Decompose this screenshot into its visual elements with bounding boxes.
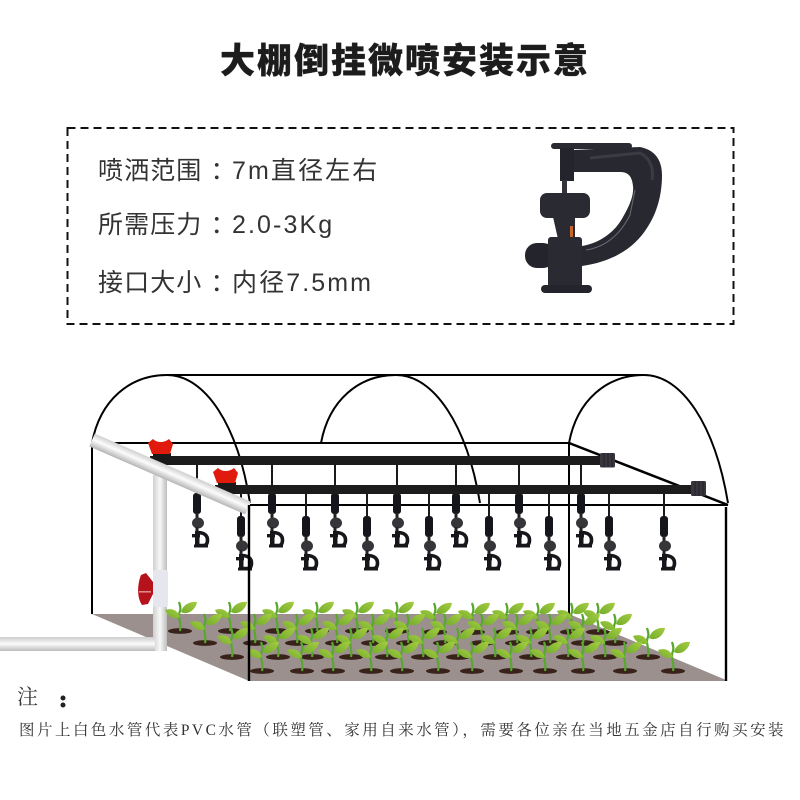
lower end cap (691, 481, 706, 496)
spec: connector size: 内径7.5mm (232, 269, 373, 297)
icon: micro sprinkler photo (525, 143, 662, 293)
title: 大棚倒挂微喷安装示意 (220, 41, 590, 81)
spec: spray range: 7m直径左右 (232, 157, 379, 185)
note heading: 注 (17, 685, 38, 709)
white vertical riser pipe (153, 475, 167, 651)
pipe union (153, 570, 168, 607)
seedlings (165, 602, 690, 674)
upper drip bar (150, 456, 602, 465)
greenhouse front post (248, 505, 250, 681)
spec: spray range: 喷洒范围 (98, 157, 202, 185)
greenhouse frame (92, 375, 728, 681)
white diagonal pipe (92, 440, 248, 508)
red valve (138, 573, 153, 605)
spec: required pressure: 所需压力 (98, 211, 202, 239)
note text: 图片上白色水管代表PVC水管（联塑管、家用自来水管），需要各位亲在当地五金店自行购买安装 (19, 720, 786, 739)
white supply pipe (0, 637, 155, 651)
upper end cap (600, 453, 615, 468)
panel: specifications (68, 128, 734, 324)
lower drip bar (215, 485, 693, 494)
upper red connector (148, 439, 173, 465)
lower red connector (213, 468, 238, 494)
note heading (17, 685, 66, 709)
spec: connector size: 接口大小 (98, 269, 202, 297)
lower sprinkler row (236, 494, 675, 570)
spec: required pressure: 2.0-3Kg (232, 211, 334, 239)
illustration: greenhouse soil (92, 614, 726, 681)
spec: required pressure: ： (210, 211, 237, 239)
upper sprinkler row (192, 465, 592, 548)
spec: connector size: ： (210, 269, 237, 297)
spec: spray range: ： (210, 157, 237, 185)
